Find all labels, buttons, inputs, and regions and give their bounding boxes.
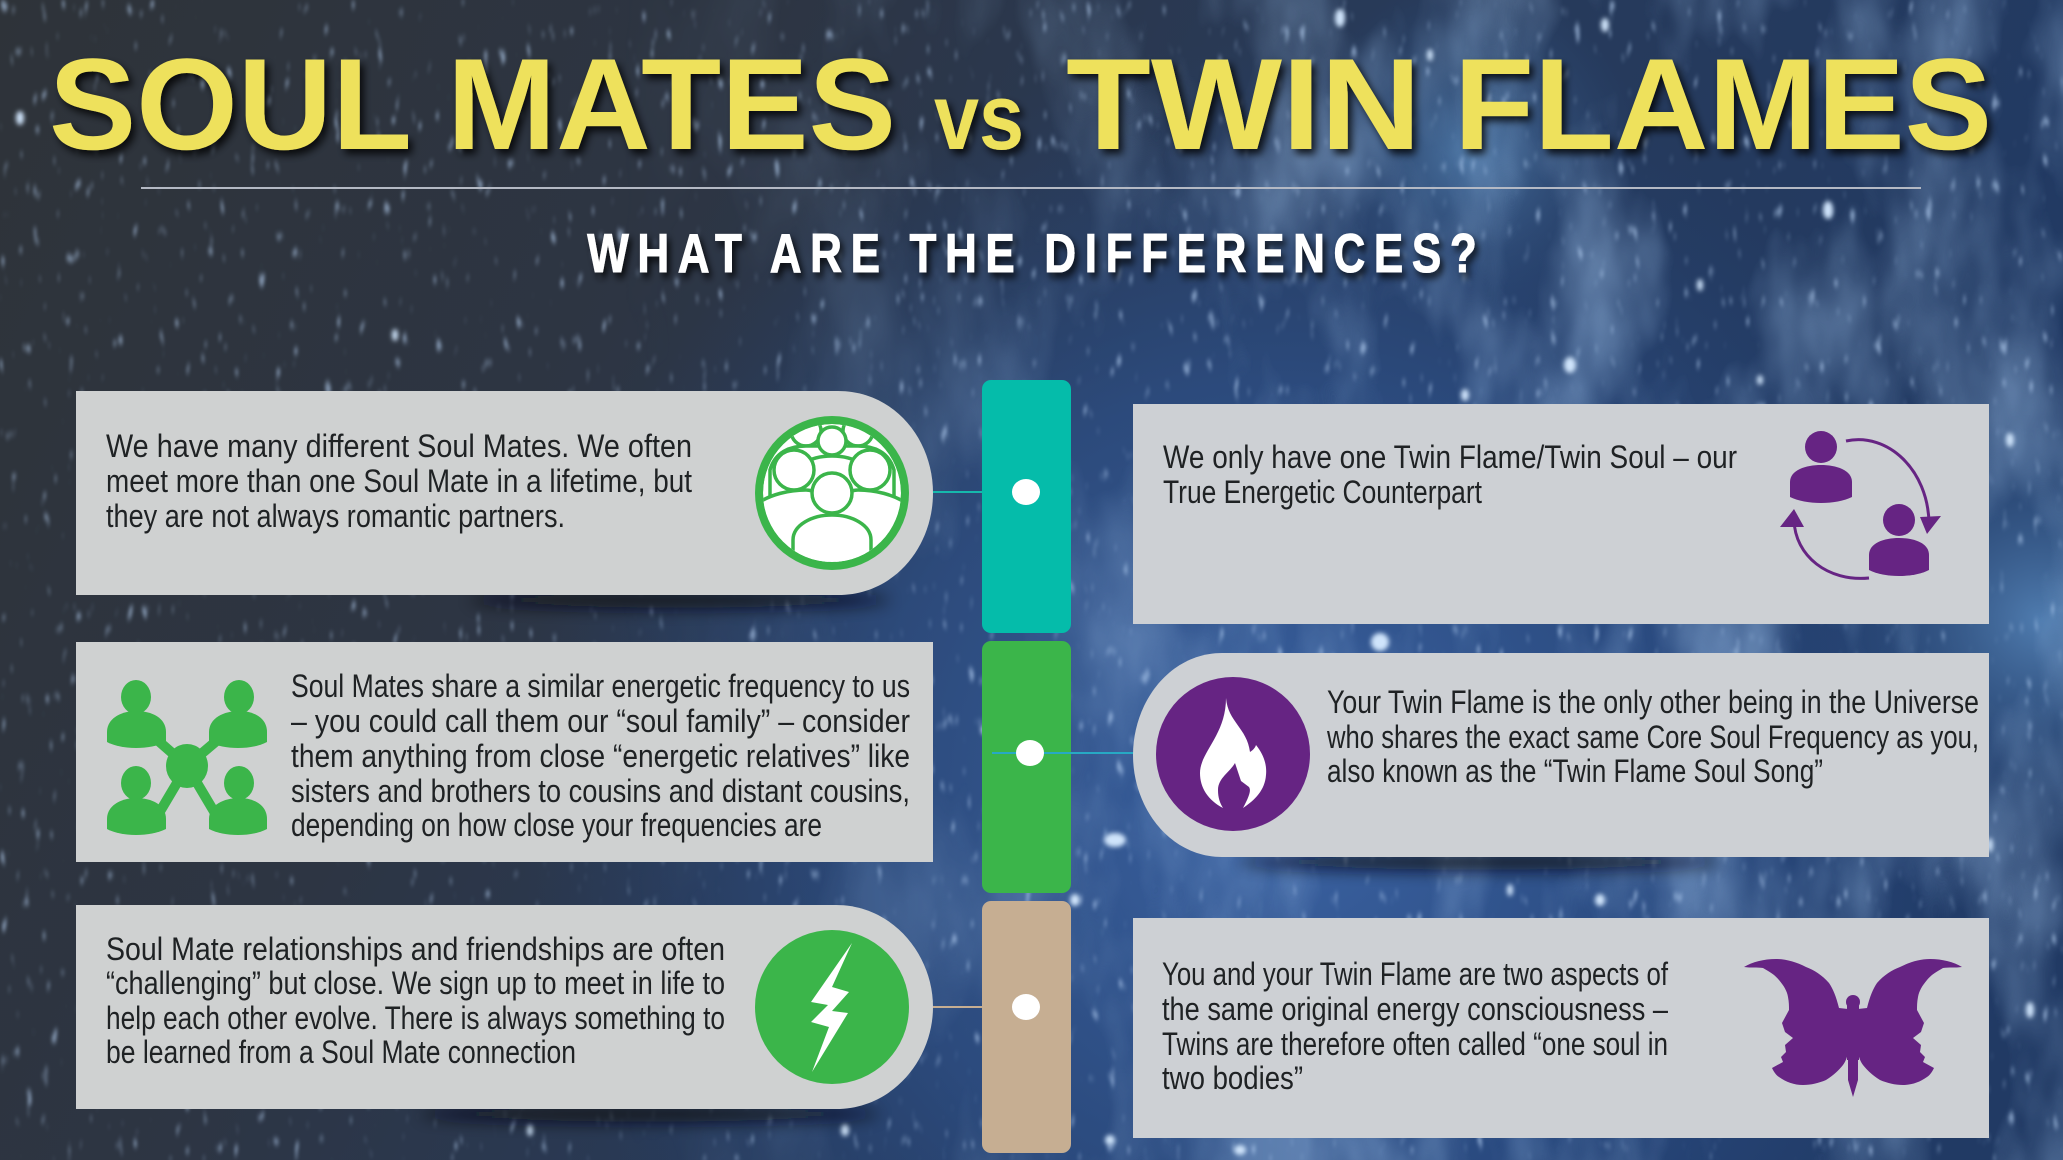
panel: challenging relationships <box>76 905 933 1109</box>
text: many soul mates <box>106 428 692 534</box>
text: one twin flame <box>1163 439 1737 510</box>
text: one soul in two bodies: two bodies” <box>1162 1060 1303 1096</box>
center bar: tan <box>982 901 1071 1153</box>
title: MATES <box>447 31 896 177</box>
panel: one twin flame <box>1133 404 1989 624</box>
text: challenging relationships <box>106 931 725 1070</box>
title: FLAMES <box>1454 31 1992 177</box>
panel: core soul frequency <box>1133 653 1989 857</box>
icon: connected people network <box>107 680 267 835</box>
text: challenging relationships: “challenging” but close. We sign up to meet in life to <box>106 965 725 1001</box>
panel shadows <box>420 592 1720 1122</box>
text: many soul mates: meet more than one Soul Mate in a lifetime, but <box>106 463 692 499</box>
text: one twin flame: We only have one Twin Flame/Twin Soul – our <box>1163 439 1737 475</box>
text: one soul in two bodies: Twins are therefore often called “one soul in <box>1162 1026 1668 1062</box>
icon: two people with cycle arrows <box>1780 431 1941 578</box>
text: core soul frequency <box>1326 684 1979 789</box>
panel: one soul in two bodies <box>1133 918 1989 1138</box>
title <box>49 31 1992 177</box>
center bar: teal <box>982 380 1071 633</box>
text: challenging relationships: be learned from a Soul Mate connection <box>106 1034 576 1070</box>
icon: crowd circle <box>755 416 909 575</box>
text: many soul mates: We have many different Soul Mates. We often <box>106 428 692 464</box>
text: soul family: them anything from close “energetic relatives” like <box>291 738 910 774</box>
text: soul family: – you could call them our “soul family” – consider <box>291 703 910 739</box>
subtitle: WHAT ARE THE DIFFERENCES? <box>587 222 1477 284</box>
title: vs <box>934 64 1024 169</box>
text: many soul mates: they are not always romantic partners. <box>106 498 565 534</box>
text: soul family <box>291 668 910 843</box>
icon: lightning bolt <box>755 930 909 1084</box>
text: one twin flame: True Energetic Counterpart <box>1163 474 1482 510</box>
panel: many soul mates <box>76 391 933 595</box>
title: SOUL <box>49 31 412 177</box>
text: soul family: depending on how close your frequencies are <box>291 807 822 843</box>
panel: soul family <box>76 642 933 862</box>
text: one soul in two bodies: You and your Twin Flame are two aspects of <box>1162 956 1668 992</box>
text: challenging relationships: help each other evolve. There is always something to <box>106 1000 725 1036</box>
center bar: green <box>982 641 1071 893</box>
text: soul family: sisters and brothers to cousins and distant cousins, <box>291 773 910 809</box>
icon: flame <box>1156 677 1310 831</box>
text: one soul in two bodies <box>1162 956 1668 1096</box>
text: one soul in two bodies: the same original energy consciousness – <box>1162 991 1668 1027</box>
text: soul family: Soul Mates share a similar energetic frequency to us <box>291 668 910 704</box>
icon: butterfly with two faces <box>1744 959 1962 1097</box>
connector lines <box>933 492 1134 1007</box>
text: challenging relationships: Soul Mate relationships and friendships are often <box>106 931 725 967</box>
text: core soul frequency: also known as the “Twin Flame Soul Song” <box>1327 753 1823 789</box>
title: TWIN <box>1066 31 1421 177</box>
